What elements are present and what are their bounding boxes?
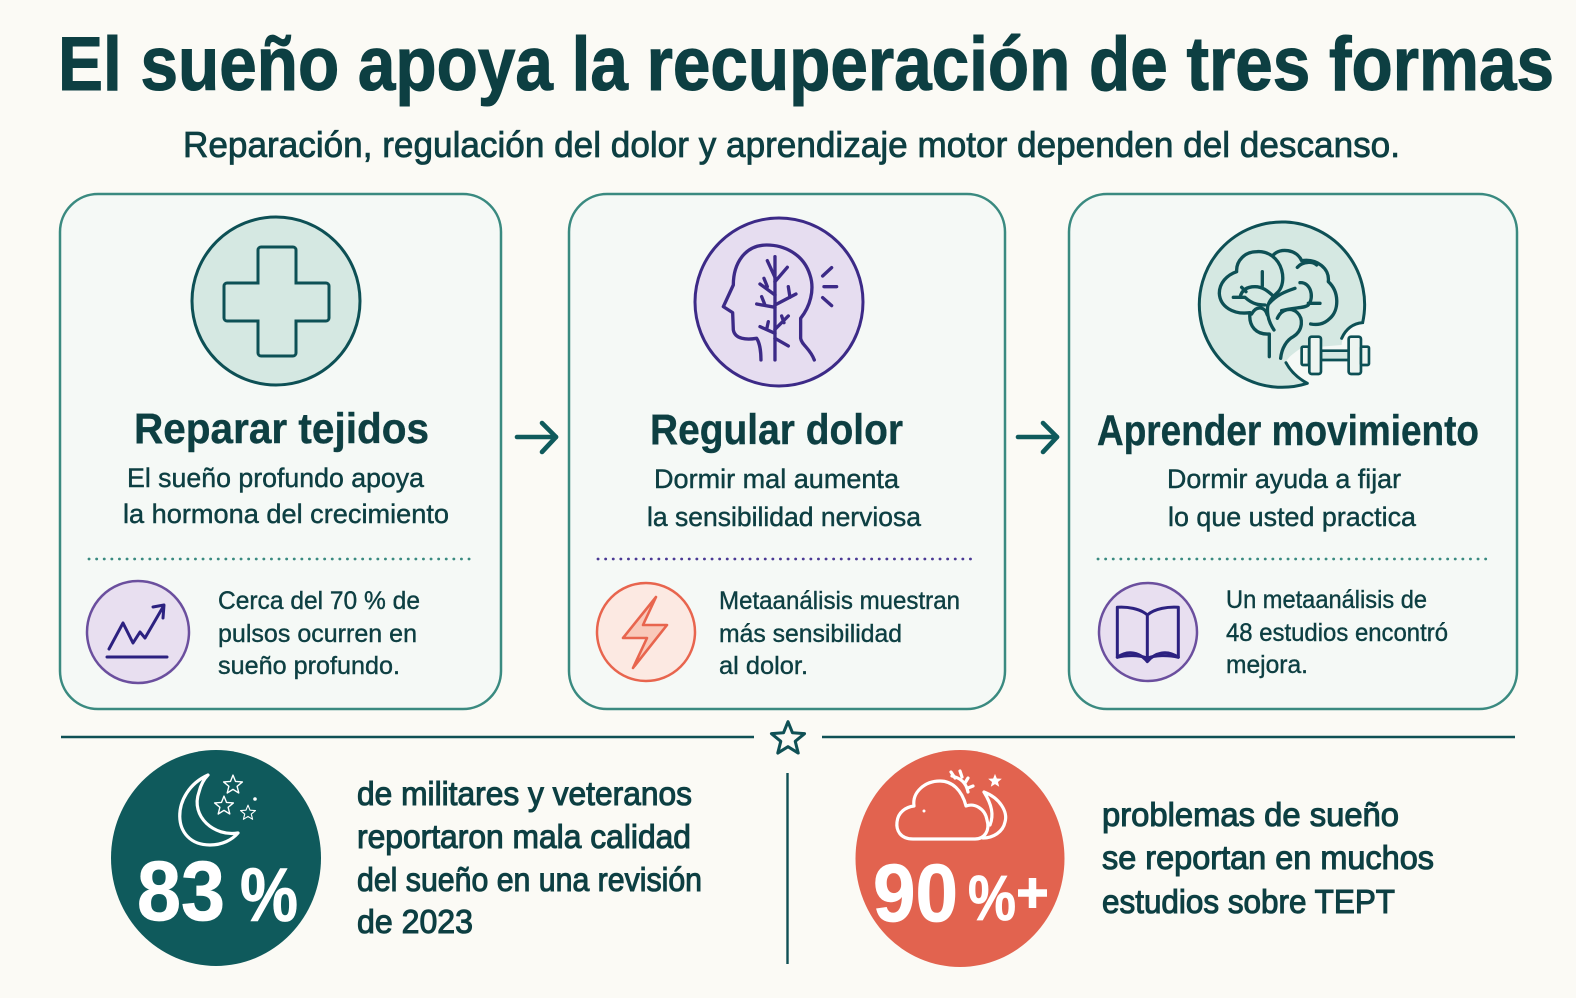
stat number: 83 %	[137, 844, 298, 938]
stat: 83 %	[111, 750, 321, 966]
stat number: 90 %+: 90	[873, 848, 958, 939]
description: regular dolor	[647, 464, 922, 532]
stat text: problemas de sueño: se reportan en muchos	[1102, 839, 1434, 876]
icon: open book	[1099, 583, 1197, 681]
evidence note: metaanálisis: Un metaanálisis de	[1226, 586, 1427, 614]
icon: medical cross	[192, 217, 360, 385]
evidence note: metaanálisis: 48 estudios encontró	[1226, 619, 1448, 647]
stat number: 83 %: %	[240, 853, 298, 938]
evidence note: sensibilidad	[719, 587, 960, 680]
description: reparar tejidos	[123, 463, 449, 529]
icon: rising chart	[87, 581, 189, 683]
stat number: 90 %+: %	[968, 862, 1016, 934]
description: aprender movimiento: lo que usted practica	[1168, 502, 1417, 532]
description: aprender movimiento: Dormir ayuda a fijar	[1167, 464, 1401, 494]
panel: aprender movimiento	[1069, 194, 1517, 709]
description: reparar tejidos: El sueño profundo apoya	[127, 463, 425, 493]
panel: reparar tejidos	[60, 194, 501, 709]
subtitle: Reparación, regulación del dolor y aprendizaje motor dependen del descanso.	[183, 124, 1400, 165]
heading: reparar tejidos: Reparar tejidos	[134, 405, 429, 453]
stat text: militares y veteranos	[357, 775, 702, 940]
stat text: militares y veteranos: de 2023	[357, 903, 473, 940]
stat text: problemas de sueño: problemas de sueño	[1102, 796, 1399, 833]
evidence note: metaanálisis	[1226, 586, 1448, 679]
heading: regular dolor: Regular dolor	[650, 406, 903, 454]
evidence note: pulsos: Cerca del 70 % de	[218, 587, 420, 615]
divider with star	[61, 722, 1515, 753]
arrow: regular to aprender	[1018, 423, 1057, 452]
evidence note: metaanálisis: mejora.	[1226, 651, 1308, 679]
stat text: militares y veteranos: de militares y veteranos	[357, 775, 692, 812]
description: regular dolor: Dormir mal aumenta	[654, 464, 900, 494]
heading: aprender movimiento: Aprender movimiento	[1097, 407, 1479, 455]
icon: moon and stars	[180, 775, 257, 845]
evidence note: pulsos	[218, 587, 420, 680]
stat text: militares y veteranos: del sueño en una revisión	[357, 861, 702, 898]
stat text: problemas de sueño	[1102, 796, 1434, 920]
evidence note: sensibilidad: Metaanálisis muestran	[719, 587, 960, 615]
evidence note: sensibilidad: más sensibilidad	[719, 620, 902, 648]
evidence note: pulsos: sueño profundo.	[218, 652, 400, 680]
icon: head with nerves	[695, 218, 863, 386]
stat number: 90 %+	[873, 848, 1047, 939]
stat: 90 %+	[856, 750, 1064, 967]
evidence note: pulsos: pulsos ocurren en	[218, 620, 417, 648]
evidence note: sensibilidad: al dolor.	[719, 652, 808, 680]
stat text: militares y veteranos: reportaron mala calidad	[357, 818, 691, 855]
icon: lightning bolt	[597, 583, 695, 681]
icon: brain with dumbbell	[1199, 222, 1369, 387]
arrow: reparar to regular	[517, 423, 556, 452]
panel: regular dolor	[569, 194, 1005, 709]
stat number: 83 %: 83	[137, 844, 225, 938]
description: reparar tejidos: la hormona del crecimiento	[123, 499, 449, 529]
description: regular dolor: la sensibilidad nerviosa	[647, 502, 922, 532]
stat text: problemas de sueño: estudios sobre TEPT	[1102, 883, 1395, 920]
description: aprender movimiento	[1167, 464, 1417, 532]
icon: cloud and moon	[897, 771, 1006, 839]
